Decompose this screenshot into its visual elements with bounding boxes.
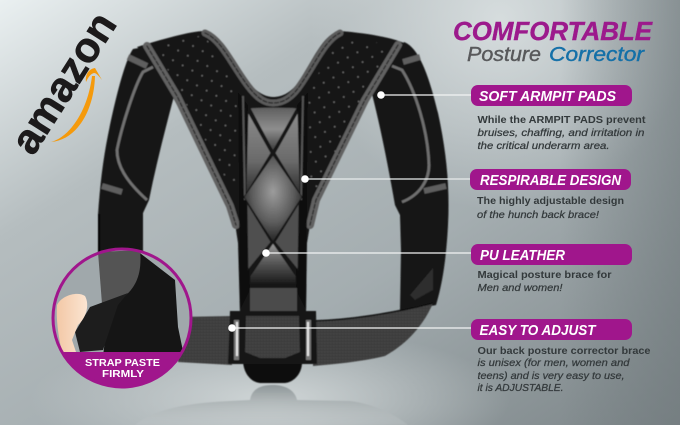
description: Magical posture brace for	[478, 269, 612, 281]
callout pointer: easy to adjust	[228, 324, 472, 332]
purple caption band	[64, 352, 180, 386]
panel: easy to adjust: EASY TO ADJUST	[480, 322, 597, 339]
panel: respirable design: RESPIRABLE DESIGN	[480, 172, 622, 189]
callout leader lines	[228, 91, 472, 332]
product reflection	[135, 385, 408, 425]
caption	[85, 357, 160, 380]
amazon logo: amazon	[1, 3, 125, 162]
right shoulder pad	[372, 42, 449, 312]
panel: easy to adjust	[471, 319, 651, 394]
callout pointer: respirable design	[301, 175, 472, 183]
back belt	[178, 303, 433, 366]
black strap panel	[103, 250, 184, 356]
icon: amazon smile arrow	[51, 68, 102, 142]
panel: pu leather	[471, 244, 632, 294]
finger	[57, 294, 87, 352]
callout pointer: armpit pads	[377, 91, 472, 99]
black flap	[75, 293, 128, 352]
caption: STRAP PASTE	[85, 357, 160, 369]
description: it is ADJUSTABLE.	[478, 382, 564, 394]
description	[478, 269, 612, 294]
y-shaped back panel	[137, 31, 404, 315]
description: Men and women!	[478, 282, 563, 294]
description: teens) and is very easy to use,	[478, 370, 624, 382]
description: is unisex (for men, women and	[478, 357, 631, 369]
perforated mesh right	[308, 36, 393, 190]
center column side stripes	[238, 92, 250, 310]
description: of the hunch back brace!	[477, 209, 599, 221]
webbing tab	[250, 288, 297, 315]
grey strap	[98, 250, 140, 304]
callout pointer: pu leather	[262, 249, 472, 257]
panel: soft armpit pads: SOFT ARMPIT PADS	[479, 88, 616, 105]
title: Posture	[467, 44, 541, 66]
caption: FIRMLY	[102, 368, 144, 380]
left shoulder pad	[98, 46, 174, 255]
description: The highly adjustable design	[477, 195, 624, 207]
panel: pu leather: PU LEATHER	[480, 247, 565, 264]
description	[478, 114, 646, 152]
description: the critical underarm area.	[478, 140, 610, 152]
description: bruises, chaffing, and irritation in	[478, 127, 645, 139]
grey edge binding	[147, 33, 398, 225]
pu leather panels	[244, 107, 302, 284]
perforated mesh left	[156, 36, 238, 190]
title	[453, 16, 653, 66]
panel: soft armpit pads	[471, 85, 646, 152]
description	[477, 195, 624, 221]
panel: respirable design	[470, 169, 631, 221]
title: Corrector	[549, 44, 646, 66]
description	[478, 345, 651, 394]
description: While the ARMPIT PADS prevent	[478, 114, 646, 126]
buckle	[228, 311, 317, 383]
description: Our back posture corrector brace	[478, 345, 651, 357]
posture brace product	[98, 31, 449, 383]
title: COMFORTABLE	[453, 16, 653, 46]
inset circle: strap paste firmly	[50, 249, 200, 392]
